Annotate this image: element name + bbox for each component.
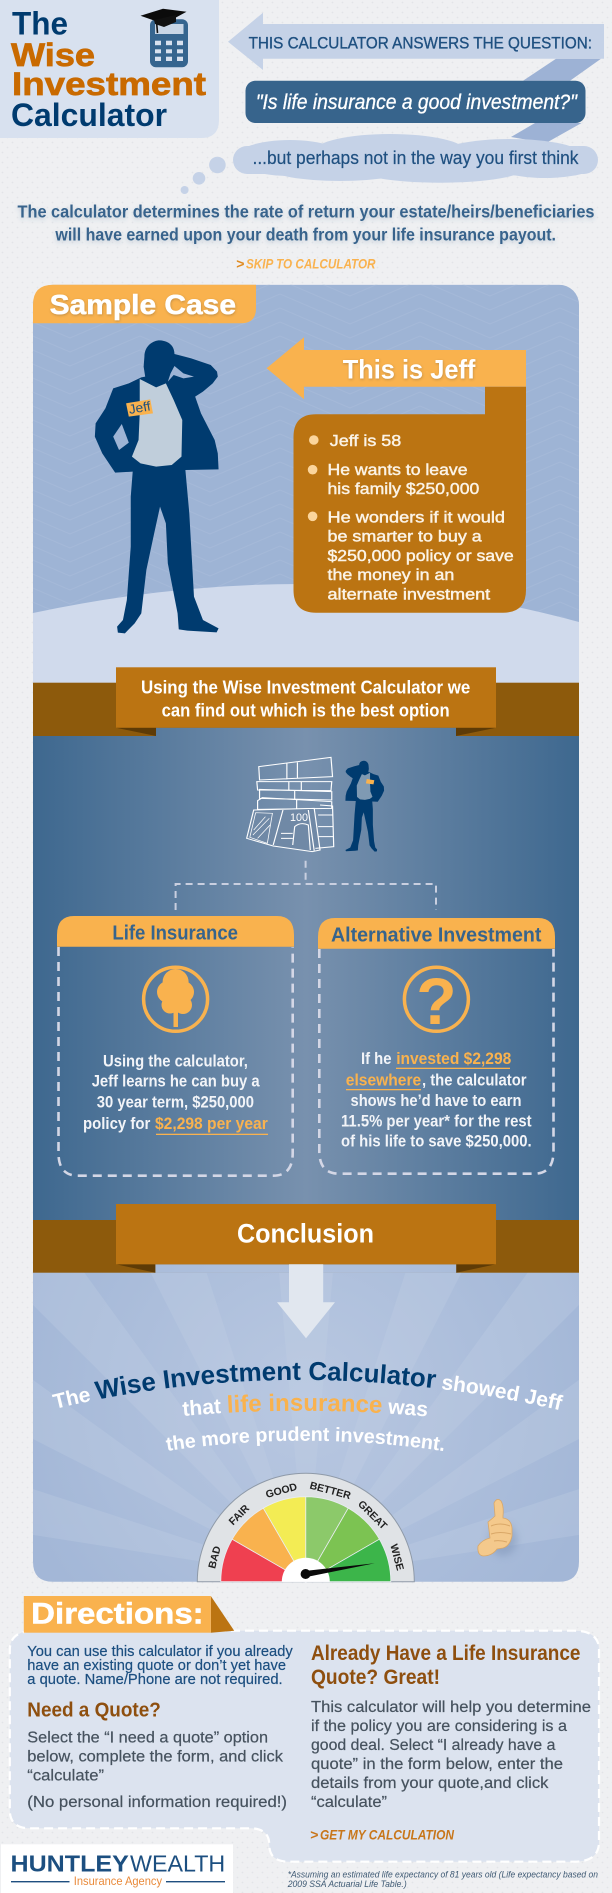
figure: small Jeff: [345, 761, 384, 852]
money denomination label: 100: [290, 812, 308, 824]
life insurance text: policy for: [83, 1114, 151, 1133]
icon: stack of money: [247, 757, 334, 852]
alternative investment text: invested $2,298: [396, 1049, 511, 1068]
footnote: [287, 1869, 598, 1890]
title: [11, 5, 206, 133]
icon: calculator with graduation cap: [140, 9, 188, 67]
gauge: [197, 1473, 414, 1582]
header title panel: [0, 0, 219, 138]
panel: life insurance: Life Insurance: [112, 922, 238, 944]
banner: using the calculator: [33, 667, 579, 736]
gauge labels: WISE: [387, 1543, 406, 1572]
need a quote: Select the “I need a quote” option: [27, 1730, 268, 1747]
alternative investment text: of his life to save $250,000.: [341, 1132, 532, 1151]
need a quote: [27, 1700, 287, 1811]
gauge labels: GOOD: [264, 1481, 299, 1501]
name tag label: Jeff: [127, 398, 152, 417]
directions panel: [10, 1596, 599, 1862]
gauge labels: GREAT: [355, 1498, 390, 1533]
question pill: "Is life insurance a good investment?": [256, 91, 578, 114]
tab: sample case: [33, 285, 256, 323]
tab: sample case: Sample Case: [50, 289, 236, 320]
callout: Jeff facts: He wonders if it would: [328, 510, 505, 527]
alternative investment text: shows he’d have to earn: [350, 1091, 522, 1110]
conclusion headline: the more prudent investment.: [166, 1426, 444, 1451]
directions tab: [24, 1596, 234, 1633]
dashed connector: [176, 861, 436, 910]
gauge labels: BAD: [206, 1544, 224, 1570]
intro text: [18, 201, 595, 245]
directions intro: [27, 1644, 293, 1688]
figure: Jeff silhouette: [95, 340, 219, 633]
skip link: >: [236, 256, 244, 272]
logo: Huntley Wealth: Insurance Agency: [74, 1874, 162, 1888]
get my calculation link: >: [310, 1826, 318, 1842]
gauge needle: [301, 1563, 375, 1579]
icon: tree: [144, 967, 208, 1031]
gauge labels: FAIR: [227, 1502, 252, 1528]
panel: sample case: [33, 285, 579, 690]
icon: thumbs up: [478, 1499, 517, 1556]
alternative investment text: If he: [361, 1049, 392, 1068]
alternative investment text: , the calculator: [422, 1071, 527, 1090]
already have a quote: quote” in the form below, enter the: [311, 1756, 563, 1773]
callout: Jeff facts: Jeff is 58: [330, 433, 401, 450]
already have a quote: This calculator will help you determine: [311, 1699, 591, 1716]
intro text: will have earned upon your death from your life insurance payout.: [54, 225, 556, 245]
panel: life insurance: [57, 916, 294, 1176]
gauge labels: BETTER: [308, 1480, 352, 1502]
directions intro: have an existing quote or don’t yet have: [27, 1658, 286, 1674]
callout: Jeff facts: alternate investment: [328, 586, 491, 603]
thought cloud: [181, 134, 598, 194]
already have a quote: good deal. Select “I already have a: [311, 1737, 556, 1754]
already have a quote: details from your quote,and click: [311, 1775, 549, 1792]
question pill: [246, 81, 586, 123]
life insurance text: $2,298 per year: [155, 1114, 268, 1133]
banner: conclusion: [33, 1204, 579, 1273]
already have a quote: Quote? Great!: [311, 1666, 440, 1689]
callout: Jeff facts: his family $250,000: [328, 481, 479, 498]
arrow: down: [277, 1264, 335, 1338]
title: Investment: [12, 66, 206, 102]
directions intro: You can use this calculator if you already: [27, 1644, 293, 1660]
icon: question mark: [404, 964, 468, 1038]
get my calculation link: GET MY CALCULATION: [320, 1826, 455, 1842]
callout: Jeff facts: the money in an: [328, 567, 454, 584]
skip link: SKIP TO CALCULATOR: [246, 256, 376, 272]
panel: comparison background: [33, 736, 579, 1220]
callout: Jeff facts: be smarter to buy a: [328, 529, 482, 546]
need a quote: “calculate”: [27, 1768, 104, 1785]
logo: Huntley Wealth: WEALTH: [130, 1851, 225, 1877]
need a quote: below, complete the form, and click: [27, 1749, 283, 1766]
already have a quote: “calculate”: [311, 1794, 387, 1811]
thought cloud: ...but perhaps not in the way you first think: [252, 148, 579, 168]
gauge labels: [206, 1480, 406, 1572]
already have a quote: Already Have a Life Insurance: [311, 1642, 580, 1665]
title: The: [12, 5, 68, 41]
need a quote: (No personal information required!): [27, 1794, 287, 1811]
life insurance text: Using the calculator,: [103, 1052, 248, 1071]
directions intro: a quote. Name/Phone are not required.: [27, 1672, 283, 1688]
banner: using the calculator: Using the Wise Investment Calculator we: [141, 678, 470, 698]
callout: Jeff facts: [294, 387, 526, 613]
footnote: 2009 SSA Actuarial Life Table.): [287, 1879, 407, 1890]
panel: alternative investment: [318, 918, 555, 1174]
logo: Huntley Wealth: HUNTLEY: [10, 1851, 129, 1877]
directions tab: Directions:: [31, 1598, 204, 1631]
life insurance text: Jeff learns he can buy a: [92, 1072, 260, 1091]
icon: question mark: ?: [416, 964, 457, 1038]
already have a quote: [310, 1642, 591, 1842]
logo: Huntley Wealth: [1, 1844, 233, 1893]
panel: conclusion background with rays: [33, 1272, 579, 1582]
already have a quote: if the policy you are considering is a: [311, 1718, 567, 1735]
conclusion headline: The Wise Investment Calculator showed Jeff: [52, 1362, 564, 1410]
arrow: this is Jeff: [267, 337, 526, 399]
callout: Jeff facts: He wants to leave: [328, 462, 468, 479]
title: Calculator: [11, 97, 167, 133]
alternative investment text: 11.5% per year* for the rest: [341, 1112, 532, 1131]
callout: Jeff facts: $250,000 policy or save: [328, 548, 514, 565]
conclusion headline: that life insurance was: [182, 1394, 427, 1416]
arrow: this calculator answers the question: [228, 13, 604, 70]
name tag: Jeff: [126, 399, 153, 417]
alternative investment text: [341, 1049, 532, 1151]
life insurance text: 30 year term, $250,000: [97, 1092, 254, 1111]
alternative investment text: elsewhere: [346, 1071, 421, 1090]
conclusion headline: [52, 1362, 564, 1451]
banner: conclusion: Conclusion: [237, 1219, 374, 1249]
ribbon folds: [511, 59, 601, 143]
banner: using the calculator: can find out which is the best option: [162, 701, 450, 721]
title: Wise: [11, 37, 95, 73]
need a quote: Need a Quote?: [27, 1700, 161, 1722]
panel: alternative investment: Alternative Investment: [331, 924, 542, 946]
life insurance text: [83, 1052, 268, 1135]
arrow: this is Jeff: This is Jeff: [343, 354, 476, 384]
